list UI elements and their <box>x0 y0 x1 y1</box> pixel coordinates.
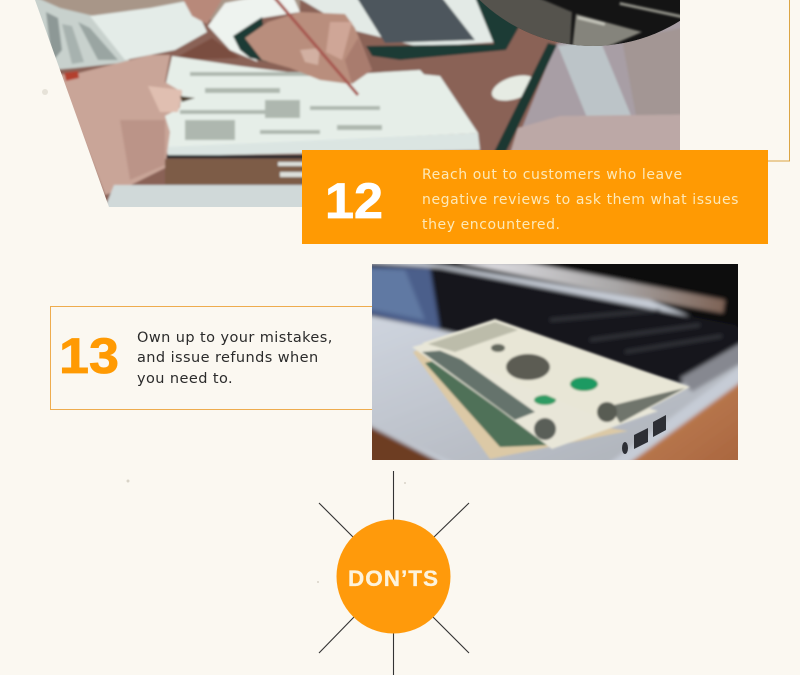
step 13 text: you need to. <box>137 371 233 387</box>
step 12 text: they encountered. <box>422 217 561 233</box>
black monitor circle <box>480 0 680 46</box>
pencil <box>274 0 358 95</box>
back wall strip <box>20 0 300 20</box>
pen in left hand <box>64 71 79 81</box>
left hand <box>62 54 183 196</box>
wood table lower <box>164 158 302 184</box>
step 12 banner <box>302 150 768 244</box>
silver bar at bottom <box>106 183 302 207</box>
outline box behind step 12 <box>680 0 790 161</box>
step 12 text: Reach out to customers who leave <box>422 167 683 183</box>
tablet <box>522 20 680 128</box>
paper specks <box>42 89 406 583</box>
don'ts label: DON’TS <box>348 566 438 591</box>
bill three <box>413 345 628 459</box>
ports on laptop edge <box>622 415 666 454</box>
white sleeve <box>90 0 207 60</box>
step 13 outlined box <box>50 306 372 410</box>
table patch under sleeves <box>180 38 238 60</box>
step 12 text: negative reviews to ask them what issues <box>422 192 739 208</box>
right hand holding pencil <box>245 12 372 84</box>
forearm top <box>183 0 222 24</box>
step 13 text: Own up to your mistakes, <box>137 330 333 346</box>
step 13 number: 13 <box>59 328 119 384</box>
papers <box>160 56 478 148</box>
bill one <box>423 318 690 409</box>
step 12 number: 12 <box>325 173 383 229</box>
white cuff <box>208 0 300 62</box>
laptop body <box>285 0 497 47</box>
handwriting on paper <box>179 70 383 141</box>
striped sweater sleeve <box>35 0 130 71</box>
mouse <box>490 74 533 102</box>
photo: team reviewing paperwork at a desk <box>35 0 680 207</box>
paper corner near mouse <box>400 72 478 133</box>
don'ts badge with rays <box>319 471 469 675</box>
step 13 text: and issue refunds when <box>137 350 319 366</box>
photo: dollar bills on a laptop <box>372 264 738 460</box>
pen tips <box>278 162 306 166</box>
bill two <box>412 342 658 449</box>
